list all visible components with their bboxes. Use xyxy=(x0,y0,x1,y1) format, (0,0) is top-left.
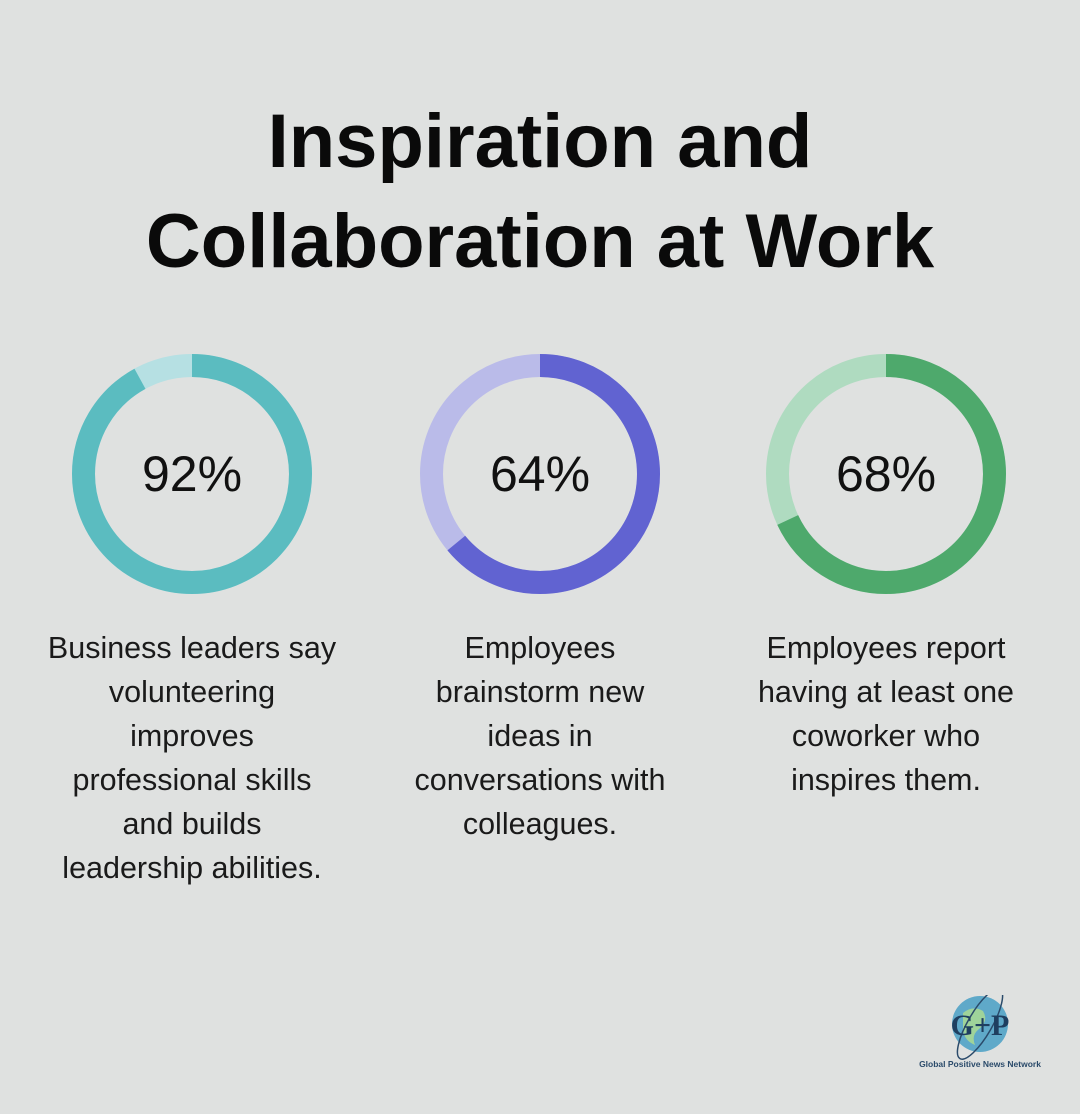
caption: 92% xyxy=(48,631,336,885)
caption: 68% xyxy=(758,631,1014,797)
caption: 68%: Employees report xyxy=(766,631,1006,665)
caption: 64%: conversations with xyxy=(415,763,665,797)
caption: 68%: coworker who xyxy=(792,719,980,753)
donut: 64%: 64% xyxy=(490,446,590,502)
caption: 68%: inspires them. xyxy=(791,763,981,797)
caption: 92%: volunteering xyxy=(109,675,275,709)
logo xyxy=(919,995,1041,1069)
caption: 68%: having at least one xyxy=(758,675,1014,709)
donut: 92%: 92% xyxy=(142,446,242,502)
donut: 92% xyxy=(72,354,312,594)
title: Inspiration and xyxy=(268,99,812,184)
donut: 68% xyxy=(766,354,1006,594)
caption: 92%: improves xyxy=(130,719,254,753)
caption: 64%: brainstorm new xyxy=(436,675,644,709)
logo: Global Positive News Network xyxy=(919,1059,1041,1069)
title xyxy=(146,99,934,284)
caption: 64%: ideas in xyxy=(487,719,593,753)
title: Collaboration at Work xyxy=(146,199,934,284)
caption: 92%: and builds xyxy=(122,807,262,841)
caption: 64%: colleagues. xyxy=(463,807,617,841)
logo: G+P xyxy=(951,1009,1009,1042)
donut: 68%: 68% xyxy=(836,446,936,502)
caption: 92%: leadership abilities. xyxy=(62,851,322,885)
caption: 64% xyxy=(415,631,665,841)
caption: 92%: professional skills xyxy=(72,763,312,797)
donut: 64% xyxy=(420,354,660,594)
caption: 92%: Business leaders say xyxy=(48,631,336,665)
caption: 64%: Employees xyxy=(465,631,615,665)
